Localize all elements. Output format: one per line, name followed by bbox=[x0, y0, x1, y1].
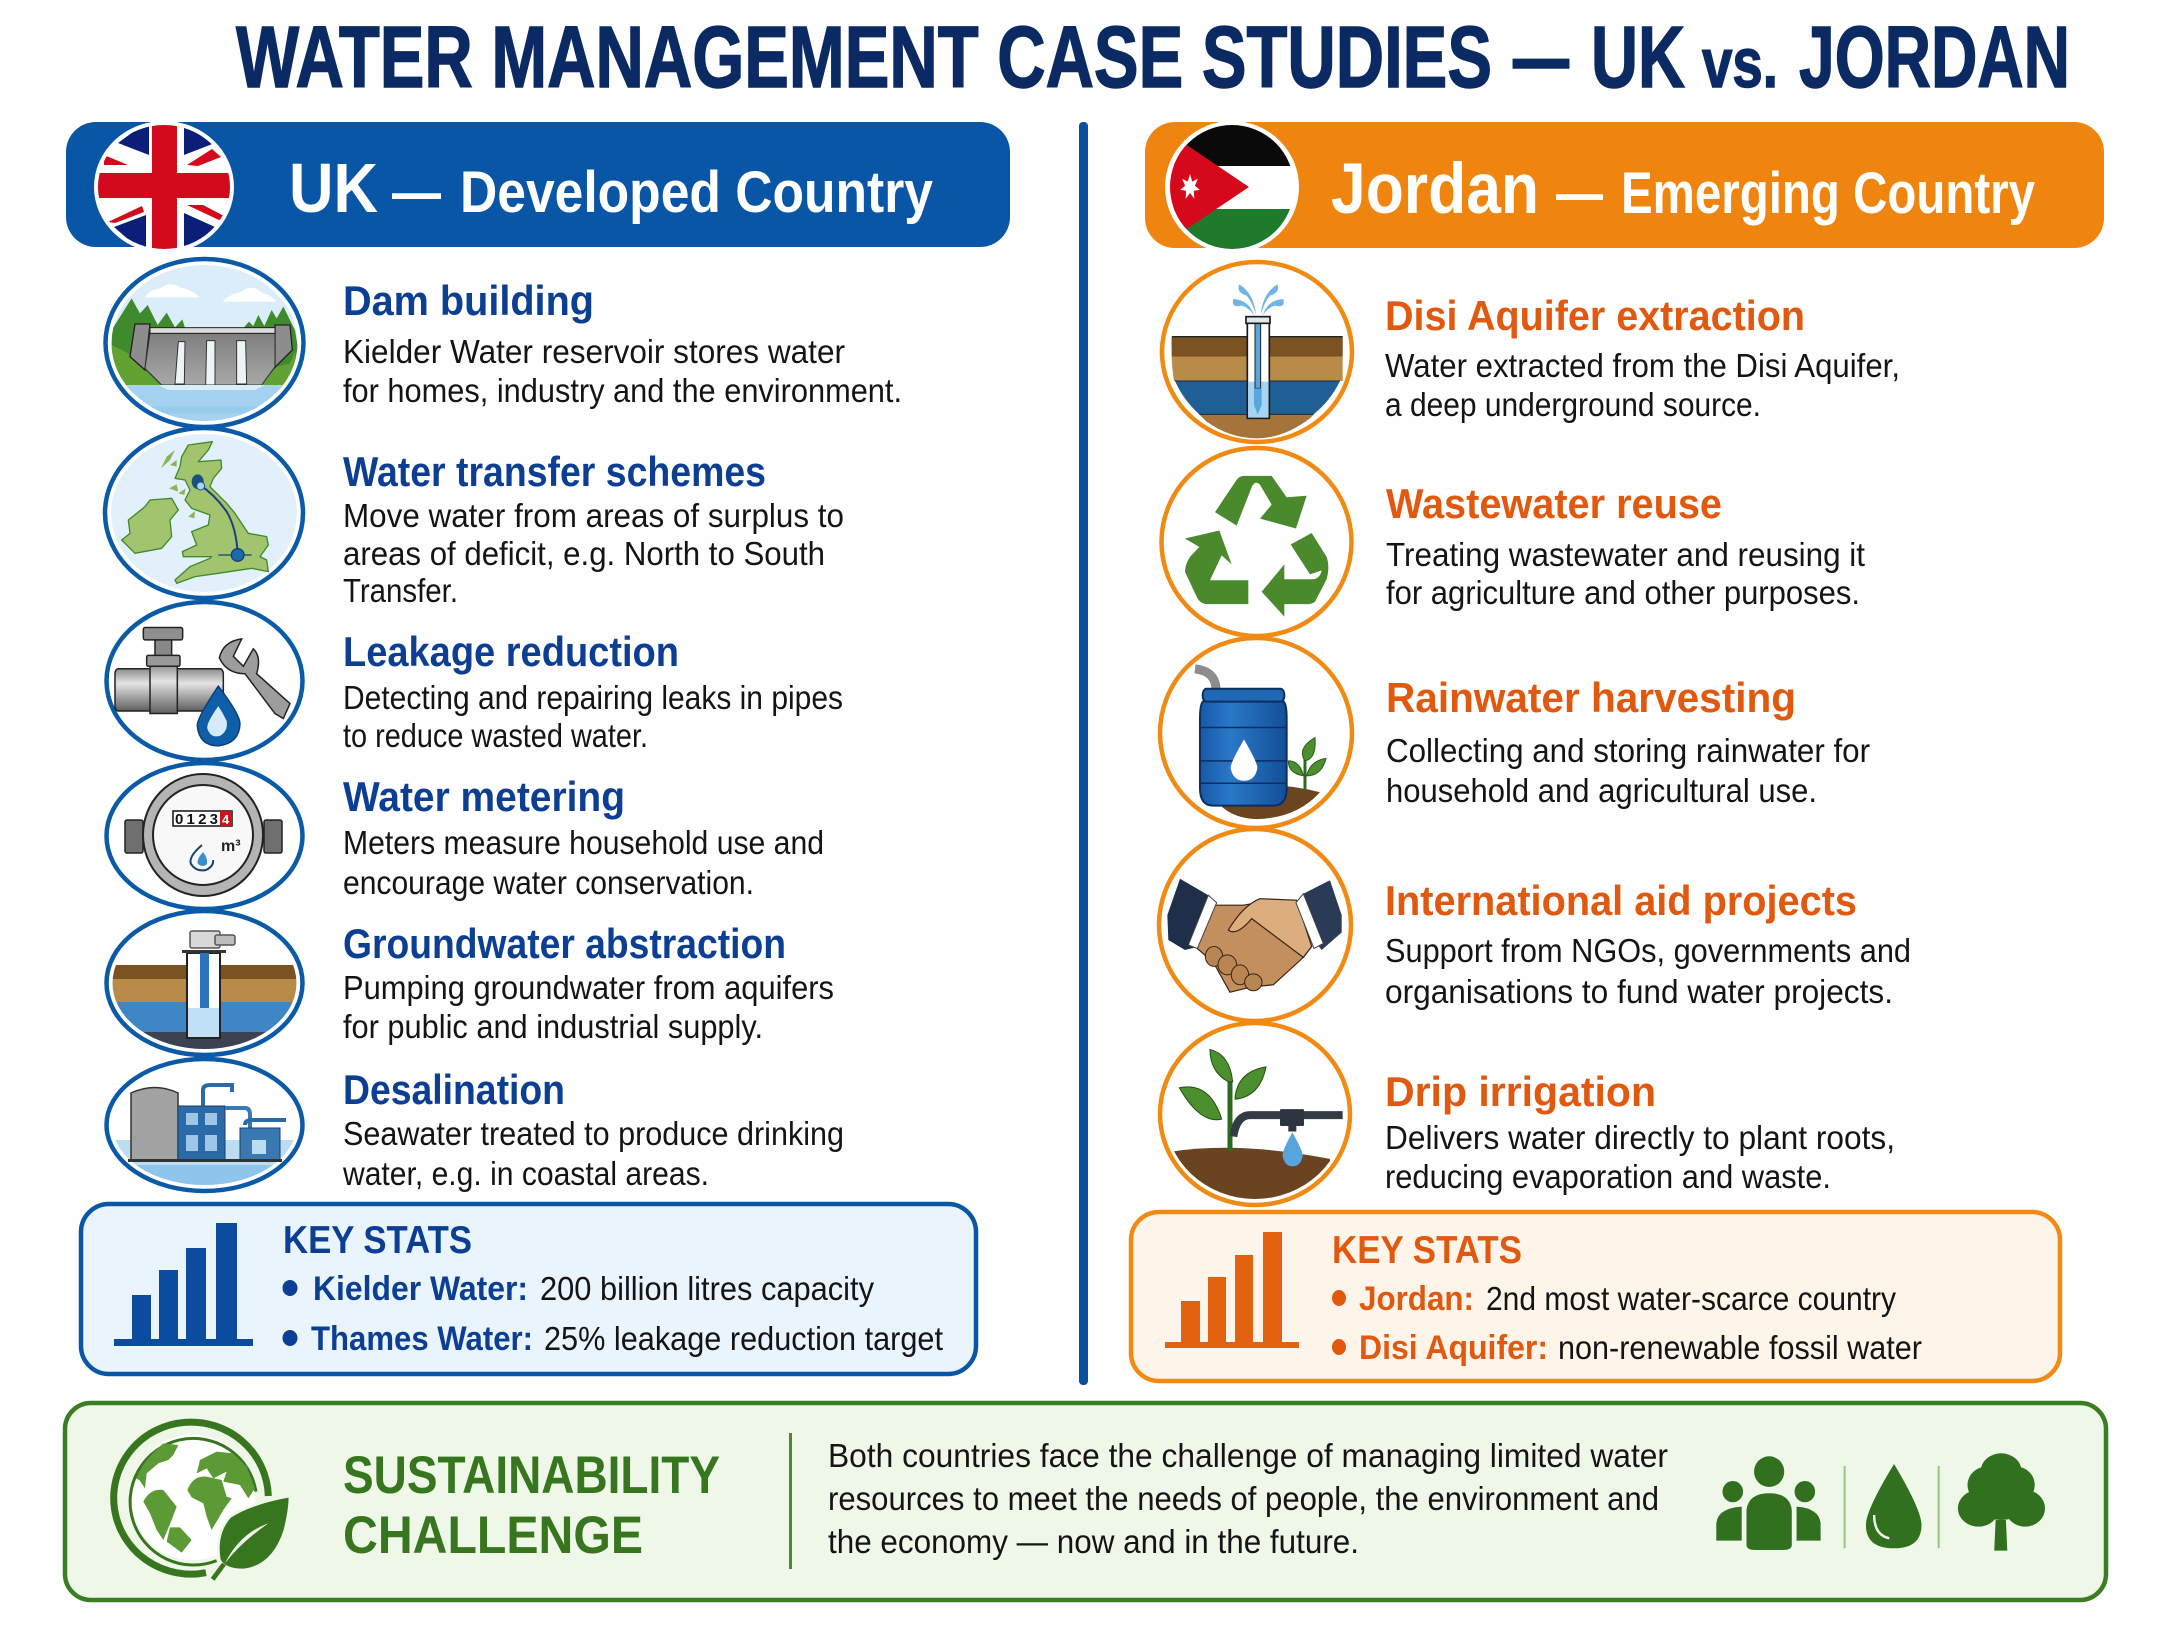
icon: Jordan flag bbox=[1160, 121, 1300, 253]
description: for public and industrial supply. bbox=[343, 1008, 763, 1045]
stat: Disi Aquifer: non-renewable fossil water bbox=[1558, 1329, 1922, 1366]
header text bbox=[1331, 150, 2035, 229]
description bbox=[343, 333, 902, 409]
heading: Rainwater harvesting bbox=[1386, 674, 1796, 721]
description bbox=[1385, 1119, 1895, 1195]
heading: Drip irrigation bbox=[1385, 1068, 1656, 1115]
description: resources to meet the needs of people, the environment and bbox=[828, 1480, 1659, 1517]
description bbox=[343, 679, 843, 754]
description bbox=[343, 497, 844, 609]
icon: UK map bbox=[105, 428, 303, 598]
description: Delivers water directly to plant roots, bbox=[1385, 1119, 1895, 1156]
item: Water metering bbox=[106, 763, 824, 909]
description: encourage water conservation. bbox=[343, 864, 754, 901]
icon: water meter: 0123 bbox=[175, 811, 218, 828]
title: — bbox=[1513, 9, 1569, 106]
stat: Disi Aquifer bbox=[1332, 1329, 1922, 1367]
stat: Kielder Water bbox=[282, 1270, 874, 1308]
description: for agriculture and other purposes. bbox=[1386, 574, 1860, 611]
item: Wastewater reuse bbox=[1162, 448, 1865, 636]
heading: Leakage reduction bbox=[343, 628, 679, 675]
stat: Jordan: Jordan: bbox=[1359, 1280, 1474, 1318]
divider between countries bbox=[1079, 122, 1088, 1385]
header text: Developed Country bbox=[460, 160, 933, 225]
heading: Disi Aquifer extraction bbox=[1385, 292, 1805, 339]
heading: KEY STATS bbox=[283, 1219, 472, 1262]
vertical rule bbox=[789, 1433, 792, 1569]
stat: Jordan: 2nd most water-scarce country bbox=[1486, 1280, 1896, 1317]
icon: handshake bbox=[1159, 829, 1351, 1021]
description: Detecting and repairing leaks in pipes bbox=[343, 679, 843, 716]
header text: — bbox=[392, 160, 441, 225]
description bbox=[343, 824, 824, 901]
description: for homes, industry and the environment. bbox=[343, 372, 902, 409]
description: Collecting and storing rainwater for bbox=[1386, 732, 1870, 769]
icon: aquifer well bbox=[1162, 262, 1352, 442]
title: UK bbox=[1591, 9, 1685, 106]
heading: Water transfer schemes bbox=[343, 448, 766, 495]
panel: UK column bbox=[66, 120, 1010, 1374]
stat: Jordan bbox=[1332, 1280, 1896, 1318]
callout: UK key stats bbox=[81, 1204, 976, 1374]
panel: Jordan column bbox=[1131, 121, 2104, 1381]
item: Water transfer schemes bbox=[105, 428, 844, 609]
description: Water extracted from the Disi Aquifer, bbox=[1385, 347, 1900, 384]
icon: globe with leaf bbox=[114, 1422, 290, 1579]
description: Transfer. bbox=[343, 572, 458, 609]
description: Pumping groundwater from aquifers bbox=[343, 969, 834, 1006]
description bbox=[1386, 732, 1870, 809]
description bbox=[342, 1115, 844, 1192]
stat: Thames Water bbox=[282, 1320, 943, 1358]
icon: drip irrigation plant bbox=[1160, 1023, 1350, 1206]
description bbox=[1385, 347, 1900, 423]
icon: groundwater well bbox=[106, 911, 302, 1062]
separators bbox=[1845, 1466, 1939, 1548]
description bbox=[1385, 932, 1911, 1010]
description: areas of deficit, e.g. North to South bbox=[343, 535, 825, 572]
stat: Kielder Water: Kielder Water: bbox=[313, 1270, 528, 1308]
icon: rain barrel and plant bbox=[1160, 638, 1352, 828]
heading: Desalination bbox=[343, 1066, 565, 1113]
stat: Disi Aquifer: Disi Aquifer: bbox=[1359, 1329, 1548, 1367]
icon: people bbox=[1716, 1456, 1821, 1550]
title: vs. bbox=[1702, 24, 1778, 102]
heading: Water metering bbox=[343, 773, 625, 820]
description: Both countries face the challenge of managing limited water bbox=[828, 1437, 1668, 1474]
icon: recycling arrows bbox=[1162, 448, 1352, 636]
item: Rainwater harvesting bbox=[1160, 638, 1870, 828]
icon: tree bbox=[1958, 1453, 2045, 1551]
description: Treating wastewater and reusing it bbox=[1386, 536, 1865, 573]
description: the economy — now and in the future. bbox=[828, 1523, 1359, 1560]
icon: desalination plant bbox=[106, 1059, 302, 1191]
description: water, e.g. in coastal areas. bbox=[342, 1155, 709, 1192]
icon: water meter: m³ bbox=[221, 838, 241, 855]
item: Leakage reduction bbox=[106, 602, 843, 760]
description: household and agricultural use. bbox=[1386, 772, 1817, 809]
description: reducing evaporation and waste. bbox=[1385, 1158, 1831, 1195]
icon: UK flag bbox=[94, 122, 234, 249]
title: WATER MANAGEMENT CASE STUDIES bbox=[236, 9, 1492, 106]
stat: Thames Water: Thames Water: bbox=[311, 1320, 533, 1358]
heading: Wastewater reuse bbox=[1386, 480, 1722, 527]
description: to reduce wasted water. bbox=[343, 717, 648, 754]
heading: International aid projects bbox=[1385, 877, 1857, 924]
heading: Dam building bbox=[343, 277, 594, 324]
icon: water meter bbox=[106, 763, 302, 909]
fountain bbox=[1233, 284, 1284, 316]
heading: Groundwater abstraction bbox=[343, 920, 786, 967]
description: organisations to fund water projects. bbox=[1385, 973, 1893, 1010]
icon: water meter: 4 bbox=[222, 812, 230, 827]
header text bbox=[289, 149, 933, 227]
heading: KEY STATS bbox=[1332, 1229, 1522, 1272]
item: Groundwater abstraction bbox=[106, 911, 834, 1062]
heading bbox=[343, 1446, 720, 1565]
description: Seawater treated to produce drinking bbox=[343, 1115, 844, 1152]
description: Support from NGOs, governments and bbox=[1385, 932, 1911, 969]
item: Desalination bbox=[106, 1059, 844, 1192]
description: a deep underground source. bbox=[1385, 386, 1761, 423]
description: Move water from areas of surplus to bbox=[343, 497, 844, 534]
header: Jordan emerging country bbox=[1145, 121, 2104, 253]
heading: CHALLENGE bbox=[343, 1506, 643, 1565]
header text: — bbox=[1556, 161, 1603, 226]
icon: bar chart bbox=[114, 1223, 253, 1346]
title: JORDAN bbox=[1799, 9, 2070, 106]
header text: Jordan bbox=[1331, 150, 1539, 229]
item: Disi Aquifer extraction bbox=[1162, 262, 1900, 442]
header: UK developed country bbox=[66, 120, 1010, 255]
description bbox=[828, 1437, 1668, 1560]
icon: water drop bbox=[1866, 1464, 1922, 1548]
stat: Thames Water: 25% leakage reduction target bbox=[544, 1320, 943, 1357]
item: Drip irrigation bbox=[1160, 1023, 1895, 1206]
item: International aid projects bbox=[1159, 829, 1911, 1021]
stat: Kielder Water: 200 billion litres capacity bbox=[540, 1270, 874, 1307]
header text: UK bbox=[289, 149, 378, 227]
icon: leaking pipe and wrench bbox=[106, 602, 302, 760]
item: Dam building bbox=[105, 259, 902, 430]
description: Meters measure household use and bbox=[343, 824, 824, 861]
description bbox=[1386, 536, 1865, 611]
description bbox=[343, 969, 834, 1045]
callout: Jordan key stats bbox=[1131, 1212, 2060, 1381]
icons: people, water, tree bbox=[1716, 1453, 2045, 1551]
icon: bar chart bbox=[1165, 1232, 1299, 1348]
description: Kielder Water reservoir stores water bbox=[343, 333, 845, 370]
panel: sustainability challenge bbox=[65, 1403, 2106, 1600]
heading: SUSTAINABILITY bbox=[343, 1446, 720, 1505]
header text: Emerging Country bbox=[1621, 161, 2035, 226]
icon: dam bbox=[105, 259, 305, 430]
